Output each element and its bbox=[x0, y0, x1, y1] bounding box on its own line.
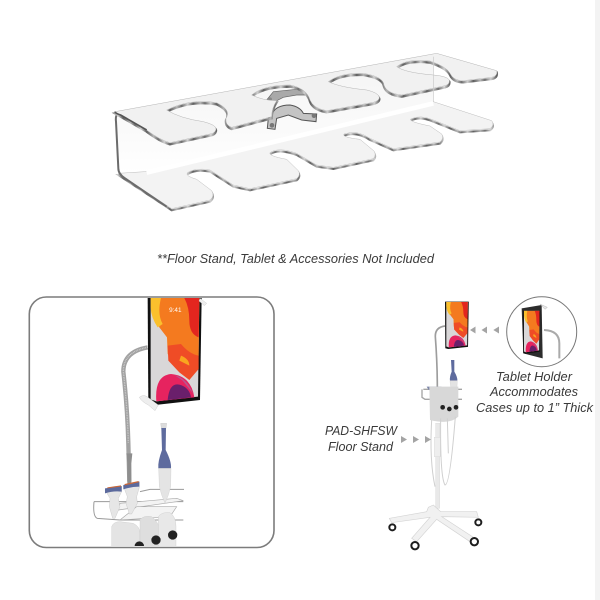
label: tablet holder: Tablet Holder bbox=[496, 369, 573, 384]
label: floor stand: PAD-SHFSW bbox=[325, 423, 399, 438]
label: tablet holder: Accommodates bbox=[489, 384, 578, 399]
probe units bbox=[112, 512, 178, 546]
label: tablet holder bbox=[476, 369, 594, 415]
tablet: 9:41 bbox=[169, 307, 182, 314]
pole bbox=[436, 423, 440, 508]
holder behind probes bbox=[94, 489, 184, 520]
casters bbox=[389, 519, 481, 549]
top plate bbox=[115, 53, 497, 144]
mounting clamp bbox=[267, 88, 317, 129]
left curved edge bbox=[116, 113, 167, 207]
body units bbox=[429, 387, 458, 422]
back wall of holder bbox=[115, 57, 433, 173]
small tablet bbox=[445, 302, 469, 349]
base bbox=[389, 505, 478, 542]
small probe bbox=[450, 360, 457, 381]
stand gooseneck bbox=[435, 326, 445, 388]
transvaginal probe bbox=[158, 423, 171, 503]
small floor stand illustration bbox=[389, 302, 481, 549]
label: floor stand bbox=[325, 423, 399, 454]
product: acrylic probe holder bbox=[115, 53, 497, 210]
background strip bbox=[595, 0, 600, 600]
panel: closeup of tablet and holder bbox=[29, 297, 274, 551]
circle inset: tablet in case bbox=[507, 297, 577, 367]
bottom plate bbox=[118, 102, 493, 210]
cables bbox=[431, 417, 455, 487]
arrows pointing to tablet bbox=[470, 326, 499, 334]
curved ultrasound probes bbox=[105, 481, 139, 518]
label: tablet holder: Cases up to 1” Thick bbox=[476, 400, 594, 415]
small holder bbox=[422, 389, 462, 399]
tablet bbox=[139, 297, 207, 411]
gooseneck arm bbox=[123, 347, 148, 482]
disclaimer note: **Floor Stand, Tablet & Accessories Not Included bbox=[157, 252, 435, 266]
label: floor stand: Floor Stand bbox=[328, 439, 394, 454]
arrows pointing to floor stand bbox=[401, 436, 431, 443]
